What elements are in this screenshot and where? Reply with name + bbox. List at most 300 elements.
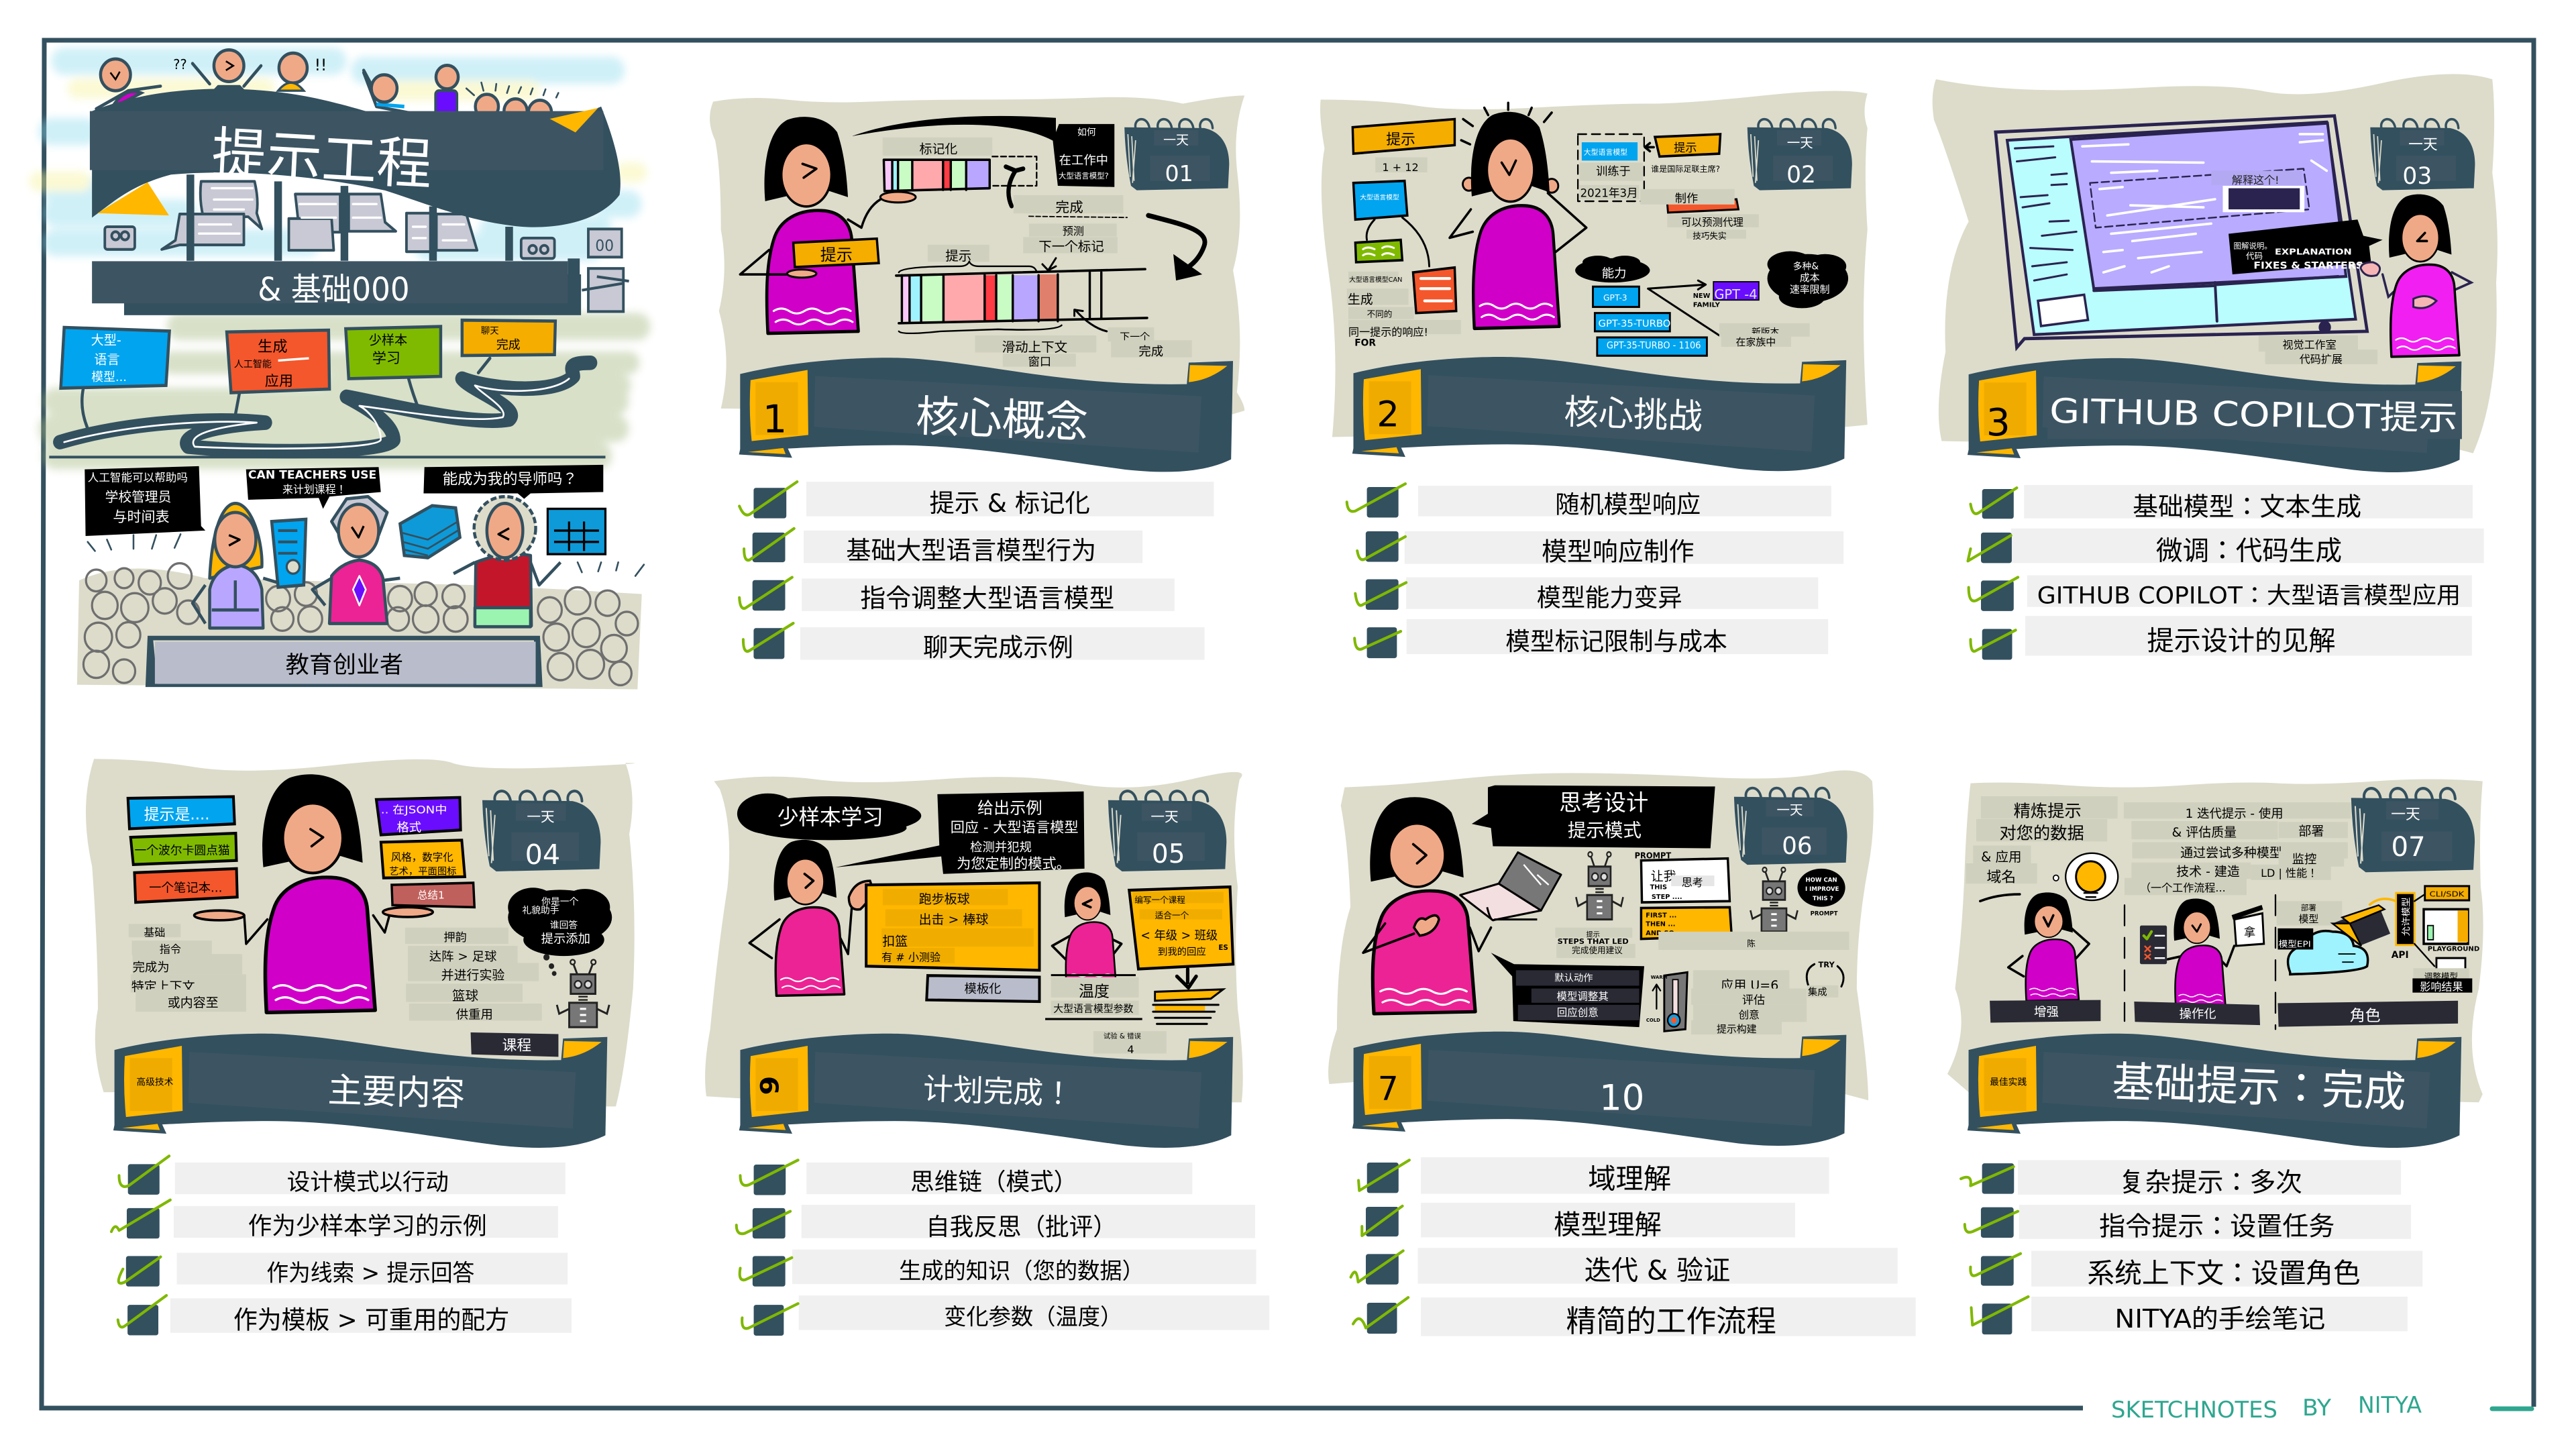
prompt cards right: 总结1 <box>417 889 445 901</box>
prompt fabrication: 技巧失实 <box>1693 231 1727 241</box>
item: generated knowledge <box>740 1250 1256 1287</box>
left notes: 或内容至 <box>168 996 219 1010</box>
refine prompts notes: & 应用 <box>1981 849 2022 865</box>
small person <box>1052 872 1122 987</box>
item: iterate and verify: 迭代 & 验证 <box>1585 1255 1730 1286</box>
prompt and model flow: 1 + 12 <box>1382 161 1419 174</box>
speech bubble: teachers: 来计划课程！ <box>282 483 347 496</box>
speech sweep and black box: 大型语言模型? <box>1059 171 1109 180</box>
robot eyes label: 00 <box>595 237 614 255</box>
panel: 2 core challenges <box>1320 91 1868 658</box>
icon: calendar <box>547 508 605 554</box>
model chips: GPT-3 <box>1603 293 1627 303</box>
course tag: 课程 <box>502 1037 531 1054</box>
prompt and model flow: 提示 <box>1386 131 1415 148</box>
speech bubble: administrators: 人工智能可以帮助吗 <box>88 472 188 484</box>
window and next completion labels: 滑动上下文 <box>1002 339 1067 355</box>
section banner: 计划完成！ <box>922 1071 1074 1112</box>
title: 提示工程 <box>210 121 433 198</box>
item: self reflection <box>737 1205 1255 1241</box>
speech box: 给出示例 <box>977 799 1042 818</box>
temperature label: 温度 <box>1079 983 1110 1000</box>
prompt cards left: 一个笔记本... <box>149 881 222 896</box>
calendar: 一天 <box>2408 137 2438 154</box>
operationalize notes: & 评估质量 <box>2172 825 2237 840</box>
title ribbon <box>90 89 621 227</box>
refine prompts notes <box>1966 796 2118 901</box>
prompt fabrication <box>1640 134 1759 241</box>
section banner <box>739 1034 1233 1148</box>
deployment cloud: 模型EPI <box>2279 939 2311 949</box>
examples board: 有 # 小测验 <box>881 951 941 964</box>
sign: large language models: 模型... <box>91 370 127 384</box>
revision strip: 陈 <box>1747 938 1756 949</box>
item: cues <box>119 1253 568 1287</box>
item: fine tuning <box>1968 529 2484 566</box>
calendar <box>1734 788 1847 865</box>
divider line <box>49 455 605 459</box>
calendar <box>2370 119 2475 191</box>
different responses note: 大型语言模型CAN <box>1349 275 1402 284</box>
speech bubble: administrators: 与时间表 <box>113 508 170 525</box>
educator: red dress <box>453 496 561 627</box>
item: base models: 基础模型：文本生成 <box>2133 492 2361 521</box>
right notes: 篮球 <box>452 988 479 1004</box>
sign: few shot learning: 学习 <box>372 350 400 366</box>
educators plaque: 教育创业者 <box>286 651 403 679</box>
arrow to paper stack <box>1177 969 1196 987</box>
training data cutoff: 2021年3月 <box>1580 187 1638 201</box>
CLI tool <box>2425 886 2469 900</box>
speech sweep and black box <box>852 116 1114 187</box>
credit: sketchnotes by Nitya: NITYA <box>2358 1392 2422 1419</box>
panel background <box>1320 91 1868 437</box>
icon: thermometer <box>1646 972 1687 1031</box>
checklist <box>1347 484 1843 658</box>
checklist <box>737 1160 1269 1336</box>
model chips <box>1593 280 1810 356</box>
calendar: 一天 <box>1787 136 1813 151</box>
cost and rate limit cloud: 成本 <box>1800 272 1820 284</box>
examples board: 跑步板球 <box>919 892 970 907</box>
prompt and model flow <box>1352 119 1456 313</box>
panel: 4 key content <box>86 759 635 1336</box>
item: instruction tuned LLM: 指令调整大型语言模型 <box>860 584 1114 613</box>
temperature label <box>1045 975 1142 1019</box>
item: examples: 作为少样本学习的示例 <box>248 1213 487 1240</box>
course tag <box>471 1032 558 1057</box>
capability cloud: 能力 <box>1602 267 1626 281</box>
copilot speech bubble: EXPLANATION <box>2275 247 2352 257</box>
person with rays <box>1450 103 1587 329</box>
window and next completion labels: 下一个 <box>1120 331 1150 343</box>
educator: lavender suit <box>193 503 278 628</box>
model chips: FAMILY <box>1693 301 1721 309</box>
sign: generative AI: 人工智能 <box>234 359 272 370</box>
speech box: 为您定制的模式。 <box>957 855 1071 872</box>
sliding window bar: 提示 <box>945 248 971 264</box>
section banner: 1 <box>763 396 787 441</box>
sign: chat completion <box>462 320 555 373</box>
operationalize notes <box>2124 802 2351 895</box>
trial and error note <box>1093 1031 1167 1056</box>
panel: 7 prompt basics complete <box>1947 780 2483 1334</box>
robot thought cloud: 礼貌助手 <box>522 905 559 916</box>
section banner <box>1968 1034 2461 1148</box>
item: examples <box>111 1200 558 1240</box>
default action box <box>1491 953 1644 1027</box>
speech papers behind the title <box>162 181 477 252</box>
section banner: 最佳实践 <box>1990 1077 2027 1088</box>
arrow: completion back up <box>1006 166 1023 206</box>
icon: certificate <box>272 519 306 587</box>
cost and rate limit cloud: 速率限制 <box>1790 284 1829 296</box>
checklist <box>1968 485 2484 660</box>
prompt fabrication: 谁是国际足联主席? <box>1651 164 1720 174</box>
improve cloud: HOW CAN <box>1805 877 1837 884</box>
right notes: 达阵 > 足球 <box>429 950 496 964</box>
item: cues: 作为线索 > 提示回答 <box>266 1260 474 1287</box>
sign: large language models <box>61 327 170 429</box>
operationalize notes: （一个工作流程... <box>2140 881 2226 894</box>
section banner <box>1968 358 2462 472</box>
completion labels: 预测 <box>1063 225 1084 237</box>
item: domain understanding: 域理解 <box>1588 1163 1671 1195</box>
item: generated knowledge: 生成的知识（您的数据） <box>899 1258 1144 1284</box>
item: stochastic responses: 随机模型响应 <box>1555 490 1701 519</box>
prompt cards right: 格式 <box>396 820 421 835</box>
code editor screen: 解释这个! <box>2232 174 2279 186</box>
speech bubble: mentors <box>423 465 603 499</box>
item: system context: 系统上下文：设置角色 <box>2087 1257 2361 1289</box>
examples board: 扣篮 <box>882 934 908 949</box>
calendar <box>1124 119 1229 191</box>
paper stack <box>1153 989 1223 1024</box>
item: model understanding <box>1362 1203 1795 1241</box>
crowd motion ticks <box>88 534 644 576</box>
operationalize notes: 通过尝试多种模型 <box>2180 846 2282 861</box>
speech box: 提示模式 <box>1568 820 1642 841</box>
panel background <box>86 759 635 1106</box>
audience crowd <box>77 564 642 690</box>
template tag: 模板化 <box>965 982 1002 996</box>
item: vary parameters: 变化参数（温度） <box>944 1304 1122 1330</box>
refine prompts notes: 域名 <box>1987 869 2016 885</box>
section banner <box>1352 357 1846 471</box>
prompt fabrication: 制作 <box>1675 193 1698 206</box>
item: token limits and cost <box>1354 619 1828 658</box>
item: chat completion examples <box>743 623 1205 662</box>
checklist <box>1961 1160 2422 1334</box>
model chips: GPT-35-TURBO <box>1599 319 1670 329</box>
item: Nitya's sketchnotes <box>1972 1297 2408 1334</box>
lesson plan card: < 年级 > 班级 <box>1140 929 1218 943</box>
credit: sketchnotes by Nitya: SKETCHNOTES <box>2111 1397 2277 1424</box>
calendar: 一天 <box>1163 133 1189 148</box>
right notes: 供重用 <box>456 1008 493 1022</box>
apply notes <box>1691 970 1807 1035</box>
refine prompts notes: 精炼提示 <box>2014 801 2082 820</box>
lesson plan card <box>1129 887 1233 969</box>
capability cloud <box>1575 256 1650 282</box>
examples board <box>866 883 1039 970</box>
API block: API <box>2392 950 2409 961</box>
audience characters on top of title: !! <box>315 55 327 74</box>
tag: roles <box>2277 1001 2458 1027</box>
item: design patterns: 设计模式以行动 <box>287 1169 449 1196</box>
sign: chat completion: 完成 <box>496 338 521 352</box>
API block <box>2369 893 2434 966</box>
calendar: 一天 <box>2391 806 2420 823</box>
left notes: 基础 <box>144 926 165 939</box>
panel background <box>1328 770 1874 1100</box>
steps note: 完成使用建议 <box>1572 945 1623 955</box>
prompt cards right <box>376 798 474 907</box>
sign: generative AI: 生成 <box>258 338 288 356</box>
left notes: 特定上下文 <box>131 979 195 994</box>
person <box>1363 797 1491 1014</box>
calendar <box>1748 119 1852 191</box>
robot thought cloud: 提示添加 <box>541 932 590 946</box>
trial and error note: 试验 & 错误 <box>1104 1032 1141 1040</box>
section banner <box>739 358 1233 472</box>
section banner: 核心概念 <box>915 392 1089 448</box>
educators plaque <box>146 636 543 687</box>
improve cloud: I IMPROVE <box>1805 886 1839 893</box>
operationalize notes: 监控 <box>2292 853 2316 867</box>
deployment cloud: 部署 <box>2301 903 2316 912</box>
panel: 1 core concepts <box>710 95 1244 662</box>
large person <box>749 840 871 996</box>
robots beside the title <box>105 227 629 311</box>
item: stochastic responses <box>1347 484 1831 519</box>
window and next completion labels: 窗口 <box>1028 356 1051 369</box>
item: capability variance: 模型能力变异 <box>1537 583 1682 612</box>
item: instruction tuned LLM <box>739 578 1175 613</box>
lesson plan card: 到我的回应 <box>1158 946 1206 958</box>
right notes: 押韵 <box>443 931 467 945</box>
section banner: 核心挑战 <box>1564 392 1703 437</box>
completion labels: 下一个标记 <box>1038 239 1104 254</box>
calendar: 07 <box>2391 832 2426 863</box>
clapperboard <box>2233 907 2264 946</box>
apply notes: 应用 U=6 <box>1721 978 1778 993</box>
calendar: 一天 <box>527 809 555 825</box>
tokenization bar <box>883 138 1036 191</box>
item: prompt insights: 提示设计的见解 <box>2147 626 2336 657</box>
right notes: 并进行实验 <box>441 968 504 983</box>
operationalize notes: 技术 - 建造 <box>2176 864 2240 879</box>
sign: generative AI: 应用 <box>265 372 293 389</box>
item: instruction prompts: 指令提示：设置任务 <box>2099 1212 2334 1242</box>
item: vary parameters <box>742 1295 1269 1336</box>
sign: few shot learning <box>345 327 441 411</box>
few shot learning cloud <box>737 794 921 840</box>
sky watercolor wash <box>38 61 637 247</box>
robot thought cloud <box>508 888 612 976</box>
tag: augment <box>1990 1000 2100 1023</box>
calendar <box>2351 788 2475 872</box>
different responses note <box>1347 272 1461 348</box>
icon: thermometer: WARM <box>1651 975 1668 980</box>
calendar: 01 <box>1165 160 1193 186</box>
tag: operationalize: 操作化 <box>2180 1008 2216 1022</box>
prompt card: PROMPT <box>1635 850 1672 860</box>
calendar <box>1108 791 1226 871</box>
winding road <box>60 363 590 451</box>
improve cloud: THIS ? <box>1813 896 1833 902</box>
code editor screen <box>1996 116 2367 347</box>
default action box: 默认动作 <box>1554 972 1593 983</box>
person <box>740 117 916 333</box>
prompt cards left: 提示是.... <box>144 806 210 824</box>
improve cloud <box>1797 869 1845 917</box>
steps note <box>1555 928 1635 958</box>
audience characters on top of title <box>97 50 558 129</box>
checklist <box>739 482 1214 662</box>
lesson plan card: 编写一个课程 <box>1134 895 1185 905</box>
calendar: 一天 <box>1776 802 1803 818</box>
calendar: 04 <box>525 839 560 871</box>
steps note: 提示 <box>1586 930 1600 938</box>
item: fabrication: 模型响应制作 <box>1542 537 1694 567</box>
copilot speech bubble: FIXES & STARTERS <box>2253 260 2363 271</box>
speech bubble: administrators: 学校管理员 <box>105 489 171 504</box>
window and next completion labels <box>975 327 1192 369</box>
prompt card: 思考 <box>1682 876 1703 889</box>
subtitle bar <box>92 258 581 315</box>
sign: large language models: 语言 <box>94 352 120 367</box>
item: templates: 作为模板 > 可重用的配方 <box>233 1305 509 1335</box>
robot reading prompt <box>1576 852 1623 920</box>
different responses note: FOR <box>1354 337 1376 348</box>
educator: pink suit <box>313 496 400 624</box>
first then card: THEN ... <box>1646 921 1675 928</box>
calendar: 03 <box>2402 163 2432 190</box>
panel background <box>1933 74 2498 453</box>
panel background <box>710 95 1244 415</box>
item: chain of thought <box>740 1160 1192 1196</box>
item: streamlined workflow: 精简的工作流程 <box>1566 1303 1776 1339</box>
speech bubble: administrators <box>85 466 205 536</box>
item: base LLM behavior: 基础大型语言模型行为 <box>846 536 1096 566</box>
tag: roles: 角色 <box>2350 1008 2381 1025</box>
section banner: 基础提示：完成 <box>2112 1057 2407 1117</box>
section banner: GITHUB COPILOT提示 <box>2049 391 2458 438</box>
right notes <box>405 928 542 1022</box>
item: fine tuning: 微调：代码生成 <box>2156 535 2342 566</box>
left notes: 指令 <box>160 943 181 956</box>
item: streamlined workflow <box>1353 1297 1916 1339</box>
try loop: 集成 <box>1808 987 1827 998</box>
lesson plan card: 适合一个 <box>1155 910 1189 920</box>
item: design patterns <box>119 1156 566 1196</box>
item: iterate and verify <box>1351 1248 1898 1286</box>
person <box>194 774 433 1012</box>
item: self reflection: 自我反思（批评） <box>926 1214 1117 1241</box>
operationalize notes: 1 迭代提示 - 使用 <box>2186 807 2284 821</box>
speech box: 思考设计 <box>1559 790 1648 816</box>
item: GitHub Copilot: GITHUB COPILOT：大型语言模型应用 <box>2037 582 2461 609</box>
item: system context <box>1970 1250 2422 1289</box>
model chips: GPT-35-TURBO - 1106 <box>1607 341 1701 352</box>
window and next completion labels: 完成 <box>1138 345 1163 359</box>
visual studio code label <box>2259 335 2377 366</box>
item: fabrication <box>1357 531 1843 567</box>
copilot speech bubble <box>2229 219 2383 274</box>
calendar <box>482 791 600 871</box>
robot asking <box>1750 867 1798 932</box>
prompt fabrication: 提示 <box>1674 142 1697 155</box>
few shot learning cloud: 少样本学习 <box>777 806 883 830</box>
item: chain of thought: 思维链（模式） <box>910 1169 1077 1196</box>
item: complex prompts <box>1961 1160 2401 1198</box>
tag: augment: 增强 <box>2034 1006 2059 1019</box>
refine prompts notes: 对您的数据 <box>1999 824 2084 843</box>
playground tool <box>2424 909 2479 953</box>
credit: sketchnotes by Nitya <box>2111 1392 2532 1424</box>
playground tool: PLAYGROUND <box>2428 946 2479 953</box>
prompt card: 让我 <box>1651 869 1676 884</box>
item: base models <box>1970 485 2473 521</box>
first then card <box>1641 907 1731 939</box>
prompt fabrication: 可以预测代理 <box>1681 217 1743 229</box>
apply notes: 评估 <box>1742 994 1765 1007</box>
speech bubble: teachers <box>246 467 381 508</box>
try loop: TRY <box>1818 960 1835 969</box>
item: model understanding: 模型理解 <box>1554 1210 1662 1241</box>
prompt cards right: 风格，数字化 <box>391 851 453 863</box>
speech box: 回应 - 大型语言模型 <box>951 820 1079 837</box>
calendar: 一天 <box>1150 809 1179 825</box>
prompt card: THIS <box>1650 884 1667 892</box>
person: 提示 <box>820 246 853 264</box>
robot <box>557 960 609 1027</box>
ground watercolor wash <box>52 327 637 455</box>
section banner: 2 <box>1377 394 1399 435</box>
server books <box>2332 905 2390 946</box>
apply notes: 提示构建 <box>1717 1023 1757 1035</box>
panel: title hero <box>38 50 644 690</box>
calendar: 06 <box>1782 833 1813 860</box>
completion labels: 完成 <box>1055 199 1083 215</box>
checklist <box>111 1156 572 1336</box>
prompt cards left: 一个波尔卡圆点猫 <box>134 843 230 857</box>
lesson plan card: ES <box>1218 944 1228 952</box>
model chips: 新版本 <box>1752 327 1780 338</box>
prompt and model flow: 大型语言模型 <box>1360 193 1399 201</box>
steps note: STEPS THAT LED <box>1558 938 1629 946</box>
revision strip <box>1658 932 1849 950</box>
speech sweep and black box: 在工作中 <box>1059 154 1108 168</box>
tokenization bar: 标记化 <box>920 142 957 157</box>
section banner: 10 <box>1599 1077 1644 1118</box>
section banner: 9 <box>757 1076 785 1095</box>
default action box: 模型调整其 <box>1556 990 1609 1002</box>
column dividers <box>2125 895 2275 1029</box>
item: GitHub Copilot <box>1969 576 2472 611</box>
copilot speech bubble: 代码 <box>2246 251 2263 261</box>
model chips: 在家族中 <box>1736 336 1776 348</box>
prompt cards right: .. 在JSON中 <box>381 804 447 816</box>
different responses note: 不同的 <box>1367 309 1392 319</box>
item: capability variance <box>1355 578 1818 612</box>
prompt card: STEP .... <box>1652 894 1682 901</box>
speech box <box>835 792 1085 874</box>
panel background <box>1947 780 2483 1102</box>
item: token limits and cost: 模型标记限制与成本 <box>1505 627 1727 656</box>
item: prompts and tokenization <box>739 482 1214 519</box>
